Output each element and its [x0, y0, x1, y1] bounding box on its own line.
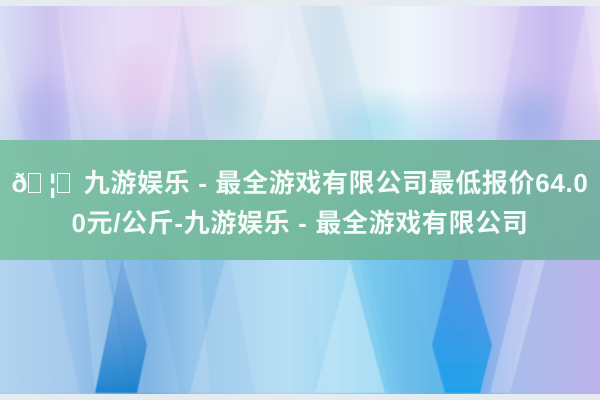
heading text	[12, 168, 588, 238]
green text band	[0, 140, 600, 260]
heading line 2: 0元/公斤-九游娱乐 - 最全游戏有限公司	[71, 208, 529, 238]
dark blue diamonds	[95, 235, 492, 393]
heading line 1: ð ¦ 九游娱乐 - 最全游戏有限公司最低报价64.0	[12, 168, 588, 198]
soft colour blobs	[23, 55, 552, 165]
